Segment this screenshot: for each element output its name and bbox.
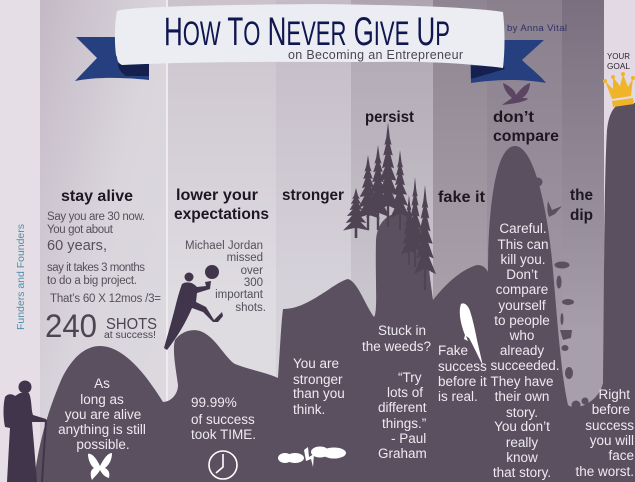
text: right before success: you will bbox=[590, 433, 634, 448]
text: you are stronger: stronger bbox=[293, 372, 343, 387]
bird icon bbox=[502, 83, 530, 105]
text: Michael Jordan: over bbox=[241, 265, 263, 277]
text: careful: yourself bbox=[498, 298, 546, 313]
text: right before success: before bbox=[592, 402, 630, 417]
text: Michael Jordan: 300 bbox=[244, 277, 263, 289]
banner ribbon right bbox=[470, 40, 546, 83]
icon: white parrot bbox=[460, 303, 483, 366]
text: careful: This can bbox=[497, 237, 549, 252]
text: 99.99%: 99.99% bbox=[191, 395, 237, 410]
heading: fake it: fake it bbox=[438, 189, 485, 206]
text: 99.99% bbox=[191, 395, 256, 442]
text: fake success: success bbox=[438, 359, 487, 374]
text: stay alive: to do a big project. bbox=[47, 275, 137, 287]
text: stay alive: You got about bbox=[47, 224, 114, 236]
text: fake success bbox=[438, 343, 487, 404]
heading: persist: persist bbox=[365, 109, 414, 126]
text: careful: to people bbox=[494, 313, 550, 328]
text: right before success: Right bbox=[598, 387, 630, 402]
text: fake success: Fake bbox=[438, 343, 468, 358]
text: as long as: anything is still bbox=[58, 422, 146, 437]
heading: stay alive: stay alive bbox=[61, 188, 133, 205]
heading: the dip: the bbox=[570, 187, 593, 204]
icon: jumping basketball player bbox=[164, 265, 223, 350]
icon: hiker bbox=[4, 380, 47, 482]
subtitle: on Becoming an Entrepreneur bbox=[288, 48, 463, 62]
text: stuck in the weeds: things.” bbox=[382, 416, 426, 431]
text: Michael Jordan: Michael Jordan bbox=[185, 240, 263, 252]
text: careful: story. bbox=[506, 405, 538, 420]
icon: butterfly bbox=[88, 453, 112, 480]
text: stuck in the weeds: Stuck in bbox=[378, 323, 426, 338]
text: as long as bbox=[58, 376, 146, 452]
heading: the dip bbox=[570, 187, 593, 224]
text: Michael Jordan: important bbox=[215, 289, 264, 301]
text: Michael Jordan: shots. bbox=[235, 302, 266, 314]
title: HOW TO NEVER GIVE UP bbox=[164, 10, 450, 54]
text: 240 shots: at success! bbox=[104, 330, 156, 341]
text: fake success: before it bbox=[438, 374, 487, 389]
text: stay alive: Say you are 30 now. bbox=[47, 211, 145, 223]
text: Michael Jordan bbox=[185, 240, 266, 314]
text: careful: who bbox=[509, 328, 534, 343]
text: careful: compare bbox=[496, 282, 548, 297]
text: stay alive: That’s 60 X 12mos /3= bbox=[50, 293, 161, 305]
icon: forest bbox=[343, 122, 436, 290]
text: careful: their own bbox=[495, 389, 549, 404]
text: careful: You don’t bbox=[494, 419, 550, 434]
text: fake success: is real. bbox=[438, 389, 478, 404]
text: stuck in the weeds bbox=[362, 323, 431, 461]
heading: don't compare: compare bbox=[493, 128, 559, 145]
text: stuck in the weeds: “Try bbox=[398, 370, 422, 385]
text: stuck in the weeds: Graham bbox=[378, 446, 427, 461]
byline: by Anna Vital bbox=[507, 23, 567, 34]
text: right before success: success bbox=[585, 418, 634, 433]
icon: clouds and lightning bbox=[278, 446, 346, 467]
text: careful: Careful. bbox=[499, 221, 547, 236]
text: careful: really bbox=[506, 435, 538, 450]
text: careful: know bbox=[506, 450, 538, 465]
text: stay alive bbox=[47, 211, 161, 305]
text: right before success bbox=[575, 387, 634, 479]
goal label bbox=[607, 51, 630, 71]
text: 240 shots: 240 bbox=[45, 308, 97, 344]
text: stay alive: 60 years, bbox=[47, 238, 107, 254]
leaves falling bbox=[534, 178, 588, 410]
text: as long as: possible. bbox=[76, 437, 130, 452]
text: stuck in the weeds: - Paul bbox=[391, 431, 426, 446]
text: stay alive: say it takes 3 months bbox=[47, 262, 145, 274]
text: 240 shots bbox=[45, 308, 157, 344]
text: careful bbox=[490, 221, 560, 480]
sidebar label: Funders and Founders bbox=[15, 224, 27, 330]
text: you are stronger: than you bbox=[293, 386, 345, 401]
mountain range silhouette bbox=[34, 103, 635, 482]
text: careful: that story. bbox=[493, 465, 551, 480]
text: Michael Jordan: missed bbox=[227, 252, 263, 264]
goal label: YOUR bbox=[607, 51, 630, 61]
text: 99.99%: of success bbox=[191, 412, 255, 427]
heading: don't compare bbox=[493, 109, 559, 145]
text: 240 shots: SHOTS bbox=[106, 316, 157, 333]
icon: crown bbox=[603, 72, 635, 107]
text: as long as: long as bbox=[80, 392, 124, 407]
text: as long as: As bbox=[94, 376, 110, 391]
heading: don't compare: don’t bbox=[493, 109, 534, 126]
text: careful: Don’t bbox=[506, 267, 538, 282]
title banner bbox=[115, 4, 505, 68]
text: right before success: face bbox=[608, 448, 634, 463]
text: 99.99%: took TIME. bbox=[191, 427, 256, 442]
text: careful: succeeded. bbox=[490, 358, 560, 373]
goal label: GOAL bbox=[607, 61, 630, 71]
heading: stronger: stronger bbox=[282, 187, 344, 204]
text: right before success: the worst. bbox=[575, 464, 634, 479]
text: careful: kill you. bbox=[500, 252, 546, 267]
heading: the dip: dip bbox=[570, 207, 593, 224]
heading: lower your expectations: expectations bbox=[174, 206, 269, 223]
text: careful: already bbox=[500, 343, 544, 358]
text: stuck in the weeds: lots of bbox=[387, 385, 423, 400]
icon: clock bbox=[209, 451, 237, 479]
text: as long as: you are alive bbox=[65, 407, 141, 422]
text: you are stronger: You are bbox=[293, 356, 339, 371]
heading: lower your expectations bbox=[174, 187, 269, 223]
heading: lower your expectations: lower your bbox=[176, 187, 258, 204]
banner ribbon left bbox=[75, 37, 149, 81]
text: stuck in the weeds: different bbox=[378, 400, 427, 415]
text: you are stronger: think. bbox=[293, 402, 325, 417]
text: you are stronger bbox=[293, 356, 345, 417]
text: careful: They have bbox=[490, 374, 554, 389]
text: stuck in the weeds: the weeds? bbox=[362, 339, 431, 354]
